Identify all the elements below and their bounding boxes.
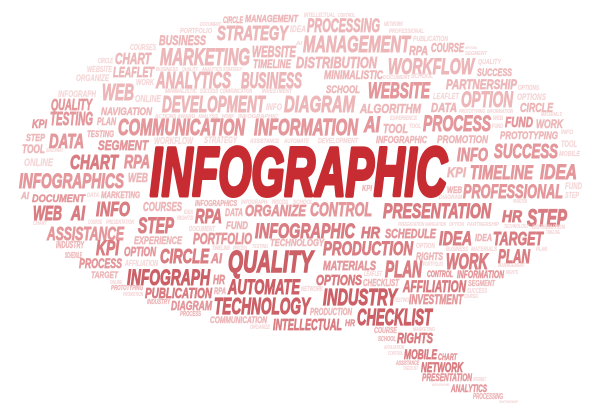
word cloud: upper bubble words: MANAGEMENT	[245, 14, 299, 25]
word cloud: upper bubble words: WORK	[536, 117, 564, 131]
word cloud: middle bubble words: ASSISTANCE	[249, 139, 280, 145]
word cloud: upper bubble words: PARTNERSHIP	[446, 76, 517, 92]
word cloud: lower bubble words: RIGHTS	[506, 270, 518, 276]
right side words: KPI	[362, 184, 373, 193]
word cloud: middle bubble words: PROCESS	[233, 246, 247, 252]
word cloud: speech bubble tail words: CHECKLIST	[403, 366, 418, 372]
word cloud: upper bubble words: INFOGRAPHIC	[238, 114, 278, 120]
word cloud: middle bubble words	[19, 131, 582, 268]
word cloud: upper bubble words: PROCESSING	[307, 16, 380, 37]
word cloud: middle bubble words: RPA	[195, 206, 222, 228]
right side words: OPTION	[449, 222, 464, 228]
word cloud: middle bubble words: DOCUMENT	[189, 226, 215, 233]
word cloud: upper bubble words: TESTING	[50, 109, 93, 129]
word cloud: middle bubble words: AI	[20, 191, 29, 202]
word cloud: middle bubble words: ASSISTANCE	[46, 224, 125, 244]
word cloud: lower bubble words: PLAN	[385, 256, 422, 282]
word cloud: middle bubble words: INFOGRAPHIC	[255, 220, 356, 243]
word cloud: lower bubble words: SEGMENT	[468, 279, 496, 288]
word cloud: upper bubble words: STRATEGY	[217, 23, 289, 45]
word cloud: lower bubble words: HR	[345, 318, 355, 328]
word cloud: speech bubble tail words: INTERNET	[473, 377, 486, 383]
word cloud: upper bubble words: AI	[363, 112, 381, 137]
word cloud: upper bubble words: ALGORITHM	[359, 101, 422, 116]
word cloud: middle bubble words: TECHNOLOGY	[270, 238, 325, 249]
word cloud: lower bubble words: PRODUCTION	[310, 307, 352, 318]
right side words: MOBILE	[559, 151, 580, 158]
word cloud: lower bubble words: PROTOTYPING	[111, 285, 143, 292]
word cloud: speech bubble tail words: MOBILE	[404, 346, 437, 362]
word cloud: speech bubble tail words: PARTNERSHIP	[499, 399, 518, 404]
word cloud: lower bubble words: SCHEDULE	[65, 251, 82, 260]
word cloud: upper bubble words: CHART	[115, 51, 152, 68]
word cloud: middle bubble words: MARKETING	[101, 190, 140, 200]
word cloud: speech bubble tail words: MARKETING	[413, 327, 435, 333]
word cloud: lower bubble words: MANAGEMENT	[498, 263, 526, 269]
right side words: KPI	[447, 164, 467, 180]
word cloud: lower bubble words: OPTIONS	[316, 272, 362, 289]
right side words: OPTION	[416, 243, 436, 250]
word cloud: middle bubble words: STEP	[26, 133, 45, 144]
word cloud: lower bubble words: INDUSTRY	[56, 240, 85, 251]
word cloud: upper bubble words: DISTRIBUTION	[296, 55, 377, 72]
word cloud: lower bubble words: HR	[213, 272, 225, 287]
word cloud: upper bubble words: WEBSITE	[87, 65, 112, 74]
word cloud: lower bubble words: OPTION	[124, 244, 156, 259]
word cloud: upper bubble words: PROCESS	[423, 111, 491, 136]
word cloud: upper bubble words: QUALITY	[182, 67, 198, 73]
right side words: WEB	[447, 185, 462, 195]
right side words: SUCCESS	[494, 141, 558, 163]
word cloud: lower bubble words: PUBLICATION	[145, 285, 213, 302]
word cloud: middle bubble words: COURSES	[143, 199, 182, 214]
word cloud: upper bubble words: TESTING	[87, 129, 114, 139]
word cloud: upper bubble words: SEGMENT	[465, 51, 488, 57]
right side words: STEP	[565, 191, 579, 200]
word cloud: lower bubble words: NETWORK	[301, 286, 324, 293]
word cloud: speech bubble tail words: PRESENTATION	[422, 372, 473, 384]
right side words: BUSINESS	[446, 247, 468, 253]
word cloud: upper bubble words: COURSE	[431, 40, 464, 55]
word cloud: upper bubble words: INTELLECTUAL	[304, 13, 335, 19]
word cloud: lower bubble words: RPA	[214, 286, 226, 296]
word cloud: upper bubble words: DOCUMENT	[383, 75, 411, 81]
word cloud: middle bubble words: FUND	[226, 220, 248, 232]
word cloud: middle bubble words: WEB	[33, 203, 62, 225]
right side words: PROMOTION	[513, 199, 527, 205]
word cloud: middle bubble words: RIGHTS	[177, 216, 193, 222]
word cloud: upper bubble words: WEB	[493, 116, 503, 122]
word cloud: middle bubble words: SCHOOL	[293, 200, 313, 206]
word cloud: speech bubble tail words: RIGHTS	[397, 330, 433, 347]
right side words: IDEA	[540, 161, 577, 184]
word cloud: middle bubble words: PRODUCTION	[323, 239, 414, 260]
word cloud: middle bubble words: CHART	[70, 152, 119, 174]
word cloud: upper bubble words: TOOL	[383, 121, 408, 136]
word cloud: middle bubble words: STEP	[138, 213, 174, 238]
word cloud: lower bubble words: CIRCLE	[160, 246, 209, 268]
word cloud: upper bubble words: SUCCESS	[200, 89, 218, 95]
right side words: FUND	[565, 181, 582, 191]
word cloud: upper bubble words: MINIMALISTIC	[165, 89, 198, 95]
word cloud: lower bubble words: DIAGRAM	[171, 298, 213, 313]
word cloud: middle bubble words: WORKFLOW	[154, 136, 194, 147]
right side words: DIAGRAM	[439, 195, 463, 201]
word cloud: lower bubble words: PROMOTION	[123, 292, 143, 298]
word cloud: middle bubble words: CHART	[33, 221, 48, 227]
word cloud: upper bubble words: WEBSITE	[368, 78, 431, 103]
word cloud: lower bubble words: COURSES	[464, 294, 478, 300]
word cloud: upper bubble words: FUND	[492, 124, 503, 130]
word cloud: upper bubble words: PUBLICATION	[413, 36, 449, 43]
right side words: TARGET	[493, 229, 544, 249]
word cloud: upper bubble words: ANALYTICS	[155, 67, 231, 93]
word cloud: upper bubble words: DEVELOPMENT	[162, 91, 266, 117]
word cloud: lower bubble words: ORGANIZE	[250, 325, 271, 331]
word cloud: lower bubble words: ONLINE	[110, 280, 122, 286]
word cloud: upper bubble words: BUSINESS	[159, 32, 206, 48]
word cloud: upper bubble words: PROTOTYPING	[500, 130, 558, 142]
word cloud: upper bubble words: BUSINESS	[156, 67, 179, 73]
word cloud: lower bubble words: INDUSTRY	[147, 299, 171, 306]
word cloud: middle bubble words: AUTOMATE	[283, 139, 310, 145]
word cloud: upper bubble words: PLAN	[97, 116, 117, 128]
word cloud: upper bubble words: DATA	[431, 100, 457, 115]
word cloud: middle bubble words: PORTFOLIO	[193, 231, 252, 248]
word cloud: upper bubble words: QUALITY	[478, 59, 502, 66]
word cloud: lower bubble words: INFORMATION	[457, 269, 505, 281]
word cloud: upper bubble words: MATERIALS	[541, 112, 562, 118]
word cloud: middle bubble words: SCHEDULE	[385, 226, 436, 241]
word cloud: lower bubble words: INTELLECTUAL	[273, 317, 342, 334]
right side words: HR	[502, 207, 523, 226]
right side words: PLAN	[536, 247, 547, 253]
word cloud: middle bubble words: DEVELOPMENT	[318, 138, 359, 145]
word cloud: upper bubble words: IDEA	[290, 24, 306, 34]
word cloud: speech bubble tail words: CHECKLIST	[357, 304, 433, 330]
word cloud: lower bubble words: INFOGRAPH	[127, 265, 211, 290]
word cloud: upper bubble words: PORTFOLIO	[180, 28, 212, 35]
word cloud: upper bubble words: COURSES	[130, 43, 156, 52]
word cloud: upper bubble words: PROTOTYPING	[459, 109, 485, 115]
word cloud: upper bubble words: TIMELINE	[253, 57, 292, 71]
word cloud: middle bubble words: PROMOTION	[437, 134, 489, 146]
word cloud: lower bubble words: CONTROL	[427, 269, 453, 279]
word cloud: lower bubble words: SUCCESS	[467, 288, 487, 295]
right side words: PARTNERSHIP	[467, 222, 500, 228]
word cloud: middle bubble words: PROCESS	[272, 200, 288, 206]
word cloud: upper bubble words: ACTIONS AWARD	[154, 114, 195, 120]
word cloud: upper bubble words: RPA	[409, 43, 428, 58]
word cloud: upper bubble words: ANALYSIS	[197, 114, 219, 120]
right side words: DISTRIBUTION	[532, 225, 566, 231]
word cloud: upper bubble words: FUND	[505, 114, 533, 131]
word cloud: middle bubble words: SEGMENT	[98, 137, 149, 153]
word cloud: middle bubble words: EXPERIENCE	[134, 235, 182, 247]
word cloud: middle bubble words: DOCUMENT	[32, 193, 86, 205]
right side words: PRESENTATION NAVIGATION	[398, 222, 446, 228]
word cloud: upper bubble words: WORK	[136, 78, 155, 87]
word cloud: upper bubble words: INFORMATION	[487, 109, 513, 115]
word cloud: middle bubble words: COURSE	[88, 220, 103, 226]
word cloud: upper bubble words: CONTROL	[338, 13, 355, 19]
word cloud: lower bubble words: KPI	[96, 237, 120, 260]
word cloud: upper bubble words: INFORMATION	[254, 114, 358, 140]
word cloud: middle bubble words: HR	[361, 225, 380, 242]
word cloud: upper bubble words: INFO	[266, 102, 282, 112]
word cloud: lower bubble words: COMMUNICATION	[210, 315, 267, 325]
word cloud: lower bubble words: CHECKLIST	[363, 278, 400, 289]
word cloud: speech bubble tail words	[357, 304, 518, 404]
word cloud: middle bubble words: IDEA	[184, 210, 193, 216]
word cloud: upper bubble words: ANALYTICS STRATEGY	[201, 67, 242, 73]
word cloud: lower bubble words: MATERIALS	[323, 258, 376, 273]
word cloud: upper bubble words: MANAGEMENT	[303, 31, 411, 57]
word cloud: middle bubble words: TOOL	[561, 139, 577, 149]
word cloud: speech bubble tail words: SCHOOL	[378, 336, 396, 343]
word cloud: middle bubble words: AI	[70, 203, 85, 225]
right side words: PLAN	[498, 247, 531, 268]
word cloud: upper bubble words: WEB	[102, 79, 134, 105]
word cloud: upper bubble words: LEAFLET	[113, 64, 155, 81]
word cloud: upper bubble words: SCHOOL	[326, 84, 360, 96]
word cloud: middle bubble words: STRATEGY	[204, 135, 238, 145]
word cloud: upper bubble words: CIRCLE	[223, 15, 244, 25]
word cloud: upper bubble words: KPI	[32, 117, 47, 131]
word cloud: speech bubble tail words: COURSE	[374, 326, 397, 335]
word cloud: middle bubble words: PRESENTATION	[383, 200, 492, 223]
word cloud: upper bubble words: ONLINE	[135, 94, 161, 105]
word cloud: upper bubble words: INFOGRAPH	[58, 89, 96, 99]
word cloud: upper bubble words: DOCUMENT	[200, 22, 222, 28]
word cloud: middle bubble words: ONLINE	[24, 157, 53, 169]
word cloud: upper bubble words: CIRCLE	[520, 100, 553, 115]
word cloud: lower bubble words: TARGET	[91, 270, 119, 280]
word cloud: speech bubble tail words: INFOGRAPHIC	[432, 382, 450, 387]
word cloud: middle bubble words: DATA	[49, 131, 84, 153]
right side words: INFO	[457, 145, 488, 165]
word cloud: middle bubble words: TIMELINE	[212, 246, 231, 252]
right side words: RIGHTS	[416, 251, 443, 263]
word cloud: lower bubble words: PROCESS	[79, 255, 122, 271]
word cloud: lower bubble words	[56, 237, 526, 334]
word cloud: lower bubble words: INDUSTRY	[323, 284, 399, 310]
word cloud: upper bubble words: BUSINESS	[241, 68, 302, 93]
word cloud: middle bubble words: INFOGRAPHICS	[195, 199, 237, 208]
word cloud: upper bubble words: EXPERIENCE	[390, 116, 418, 122]
word cloud: speech bubble tail words: ASSISTANCE	[395, 361, 420, 367]
word cloud: middle bubble words: ORGANIZE	[245, 203, 307, 220]
word cloud: upper bubble words: OPTIONS	[518, 85, 539, 92]
word cloud: upper bubble words: SUCCESS	[477, 67, 512, 79]
word cloud: middle bubble words: INFOGRAPHICS	[19, 170, 124, 193]
word cloud: upper bubble words: DIAGRAM	[284, 91, 356, 117]
word cloud: middle bubble words: PRESENTATION	[106, 220, 134, 226]
word cloud: middle bubble words: INFOGRAPH	[241, 200, 267, 206]
word cloud: upper bubble words: WORKFLOW	[388, 54, 475, 79]
word cloud: middle bubble words: DEVELOPMENT	[46, 148, 63, 154]
word cloud: upper bubble words: WORK	[222, 114, 234, 120]
word cloud: speech bubble tail words: CHART	[438, 352, 458, 362]
word cloud: upper bubble words: NAVIGATION	[101, 106, 153, 118]
right side words: IDEA	[439, 229, 472, 250]
word cloud: lower bubble words: TESTING	[394, 298, 409, 304]
word cloud: middle bubble words: RPA	[124, 152, 150, 172]
right side words: TIMELINE	[546, 230, 560, 236]
word cloud: upper bubble words: INVESTMENT	[262, 89, 293, 95]
word cloud: middle bubble words: DATA	[87, 193, 99, 199]
word cloud: speech bubble tail words: ANALYTICS	[450, 383, 487, 395]
word cloud: speech bubble tail words: CONTROL	[388, 351, 403, 357]
word cloud: lower bubble words: PROCESS	[180, 311, 201, 318]
word cloud: lower bubble words: LEAFLET	[364, 271, 382, 278]
word cloud: upper bubble words: ORGANIZE	[76, 73, 110, 83]
word cloud: speech bubble tail words: AFFILIATION	[383, 345, 404, 351]
word cloud: upper bubble words: CIRCLE	[98, 58, 113, 65]
word cloud: middle bubble words: TOOL	[22, 142, 45, 156]
right side words	[362, 141, 582, 268]
word cloud: upper bubble words: SCHOOL	[411, 74, 433, 80]
word cloud: lower bubble words: PORTFOLIO	[423, 262, 443, 268]
word cloud: upper bubble words: COMMUNICATION	[220, 89, 252, 95]
word cloud: lower bubble words: AUTOMATE	[227, 276, 301, 299]
word cloud: upper bubble words: PROFESSIONAL	[389, 29, 424, 35]
word cloud: upper bubble words: QUALITY	[51, 97, 93, 114]
word cloud: upper bubble words	[32, 13, 573, 142]
word cloud: lower bubble words: TECHNOLOGY	[214, 293, 312, 319]
word cloud: upper bubble words: INFO	[561, 130, 573, 136]
word cloud: upper bubble words: MINIMALISTIC	[324, 68, 383, 82]
word cloud: lower bubble words: AFFILIATION	[124, 259, 158, 268]
word cloud: upper bubble words: LEAFLET	[433, 92, 460, 101]
word cloud: middle bubble words: TESTING	[252, 244, 268, 250]
right side words: IDEA	[475, 233, 492, 244]
word cloud: middle bubble words: CONTROL	[310, 200, 372, 221]
word cloud: lower bubble words: INVESTMENT	[409, 291, 464, 307]
word cloud: upper bubble words: MARKETING	[160, 44, 250, 71]
right side words: TECHNOLOGY	[504, 224, 529, 230]
word cloud: lower bubble words: QUALITY	[228, 244, 315, 279]
word cloud: lower bubble words: WORK	[446, 249, 489, 274]
word cloud: upper bubble words: OPTIONS	[517, 92, 546, 102]
word cloud: upper bubble words: COMMUNICATION	[118, 114, 245, 140]
right side words: STEP	[527, 205, 568, 232]
word cloud: middle bubble words: DATA	[225, 207, 243, 219]
word cloud: upper bubble words: WEBSITE	[252, 44, 297, 61]
right side words: MATERIALS	[471, 247, 497, 253]
word cloud: lower bubble words: AFFILIATION	[402, 277, 466, 296]
right side words: TIMELINE	[470, 163, 534, 184]
word cloud: middle bubble words: INFO	[96, 199, 130, 221]
word cloud: upper bubble words: OPTION	[461, 87, 514, 112]
word cloud: upper bubble words: AI	[295, 41, 303, 47]
word cloud: speech bubble tail words: PROCESSING	[473, 392, 503, 401]
word cloud: upper bubble words: TOOL	[409, 124, 421, 130]
word cloud: speech bubble tail words: NETWORK	[421, 359, 464, 375]
word cloud: middle bubble words: INFOGRAPHIC	[376, 135, 428, 146]
word cloud: upper bubble words: OPTIONS	[465, 45, 477, 50]
word cloud: lower bubble words: AI	[210, 250, 223, 266]
word cloud: upper bubble words: NETWORK	[384, 22, 403, 28]
word cloud: middle bubble words: WEB	[128, 170, 148, 185]
